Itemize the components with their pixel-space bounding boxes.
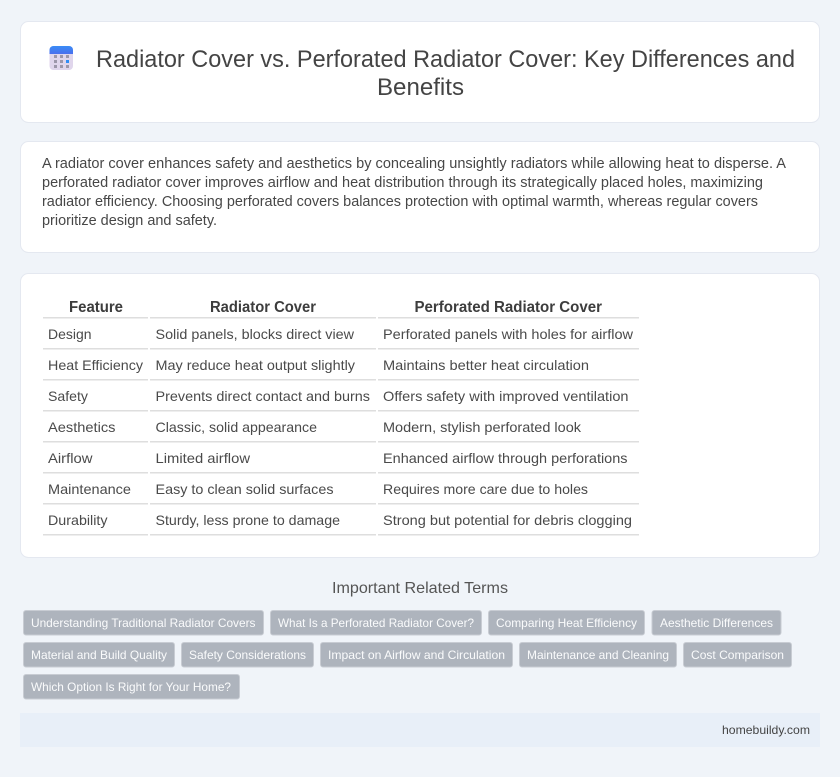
panel: title card	[20, 22, 820, 122]
row: design: Solid panels, blocks direct view	[156, 326, 355, 342]
tag: Impact on Airflow and Circulation	[328, 648, 505, 662]
tag: What Is a Perforated Radiator Cover?	[278, 616, 474, 630]
icon: calendar	[50, 46, 73, 70]
row: heat efficiency: May reduce heat output slightly	[156, 357, 355, 373]
panel: summary paragraph: prioritize design and safety.	[42, 213, 217, 229]
heading: related terms: Important Related Terms	[332, 580, 508, 597]
tag	[24, 642, 174, 667]
title: Benefits	[377, 74, 464, 101]
row: airflow: Airflow	[48, 450, 93, 466]
tag	[320, 642, 512, 667]
row: design: Design	[48, 326, 92, 342]
panel: summary paragraph: radiator efficiency. Choosing perforated covers balances protection with optimal warmth, whereas regular covers	[42, 194, 758, 210]
table header: Radiator Cover	[210, 299, 316, 316]
tag	[270, 610, 482, 635]
tag	[520, 642, 676, 667]
row: safety: Prevents direct contact and burns	[156, 388, 370, 404]
row: aesthetics	[48, 419, 582, 435]
title: Radiator Cover vs. Perforated Radiator Cover: Key Differences and	[96, 46, 795, 73]
row: safety: Offers safety with improved ventilation	[383, 388, 628, 404]
row: durability: Durability	[48, 512, 108, 528]
tag: Aesthetic Differences	[660, 616, 773, 630]
panel: summary paragraph: perforated radiator cover improves airflow and heat distribution through its strategically placed holes, maximizing	[42, 175, 763, 191]
tag: Material and Build Quality	[31, 648, 167, 662]
tag: Maintenance and Cleaning	[527, 648, 669, 662]
tag	[182, 642, 314, 667]
row: aesthetics: Modern, stylish perforated look	[383, 419, 582, 435]
table header: Feature	[69, 299, 123, 316]
tag: Cost Comparison	[691, 648, 784, 662]
row: heat efficiency: Heat Efficiency	[48, 357, 143, 373]
row: safety: Safety	[48, 388, 88, 404]
row: durability	[48, 512, 632, 528]
row: aesthetics: Classic, solid appearance	[156, 419, 317, 435]
row: maintenance: Requires more care due to holes	[383, 481, 588, 497]
tag	[684, 642, 792, 667]
footer: homebuildy.com	[722, 723, 810, 737]
row: durability: Sturdy, less prone to damage	[156, 512, 340, 528]
row: heat efficiency	[48, 357, 589, 373]
footer	[20, 713, 820, 747]
row: maintenance: Maintenance	[48, 481, 131, 497]
tag	[488, 610, 644, 635]
row: heat efficiency: Maintains better heat circulation	[383, 357, 589, 373]
tag: Comparing Heat Efficiency	[496, 616, 637, 630]
row: airflow: Enhanced airflow through perforations	[383, 450, 628, 466]
panel: comparison table	[20, 274, 820, 558]
tag	[652, 610, 781, 635]
row: design: Perforated panels with holes for airflow	[383, 326, 634, 342]
row: durability: Strong but potential for debris clogging	[383, 512, 632, 528]
row: airflow: Limited airflow	[156, 450, 251, 466]
row: design	[48, 326, 634, 342]
table header: Perforated Radiator Cover	[414, 299, 602, 316]
tag list	[24, 610, 792, 699]
row: airflow	[48, 450, 628, 466]
row: safety	[48, 388, 628, 404]
row: maintenance: Easy to clean solid surfaces	[156, 481, 334, 497]
table header	[69, 299, 602, 316]
tag	[24, 674, 240, 699]
panel: summary paragraph	[20, 142, 820, 252]
tag: Understanding Traditional Radiator Covers	[31, 616, 256, 630]
panel: summary paragraph: A radiator cover enhances safety and aesthetics by concealing unsightly radiators while allowing heat to disperse. A	[42, 156, 786, 172]
row: maintenance	[48, 481, 588, 497]
title	[96, 46, 795, 101]
row: aesthetics: Aesthetics	[48, 419, 116, 435]
tag	[24, 610, 264, 635]
tag: Safety Considerations	[189, 648, 306, 662]
tag: Which Option Is Right for Your Home?	[31, 680, 231, 694]
